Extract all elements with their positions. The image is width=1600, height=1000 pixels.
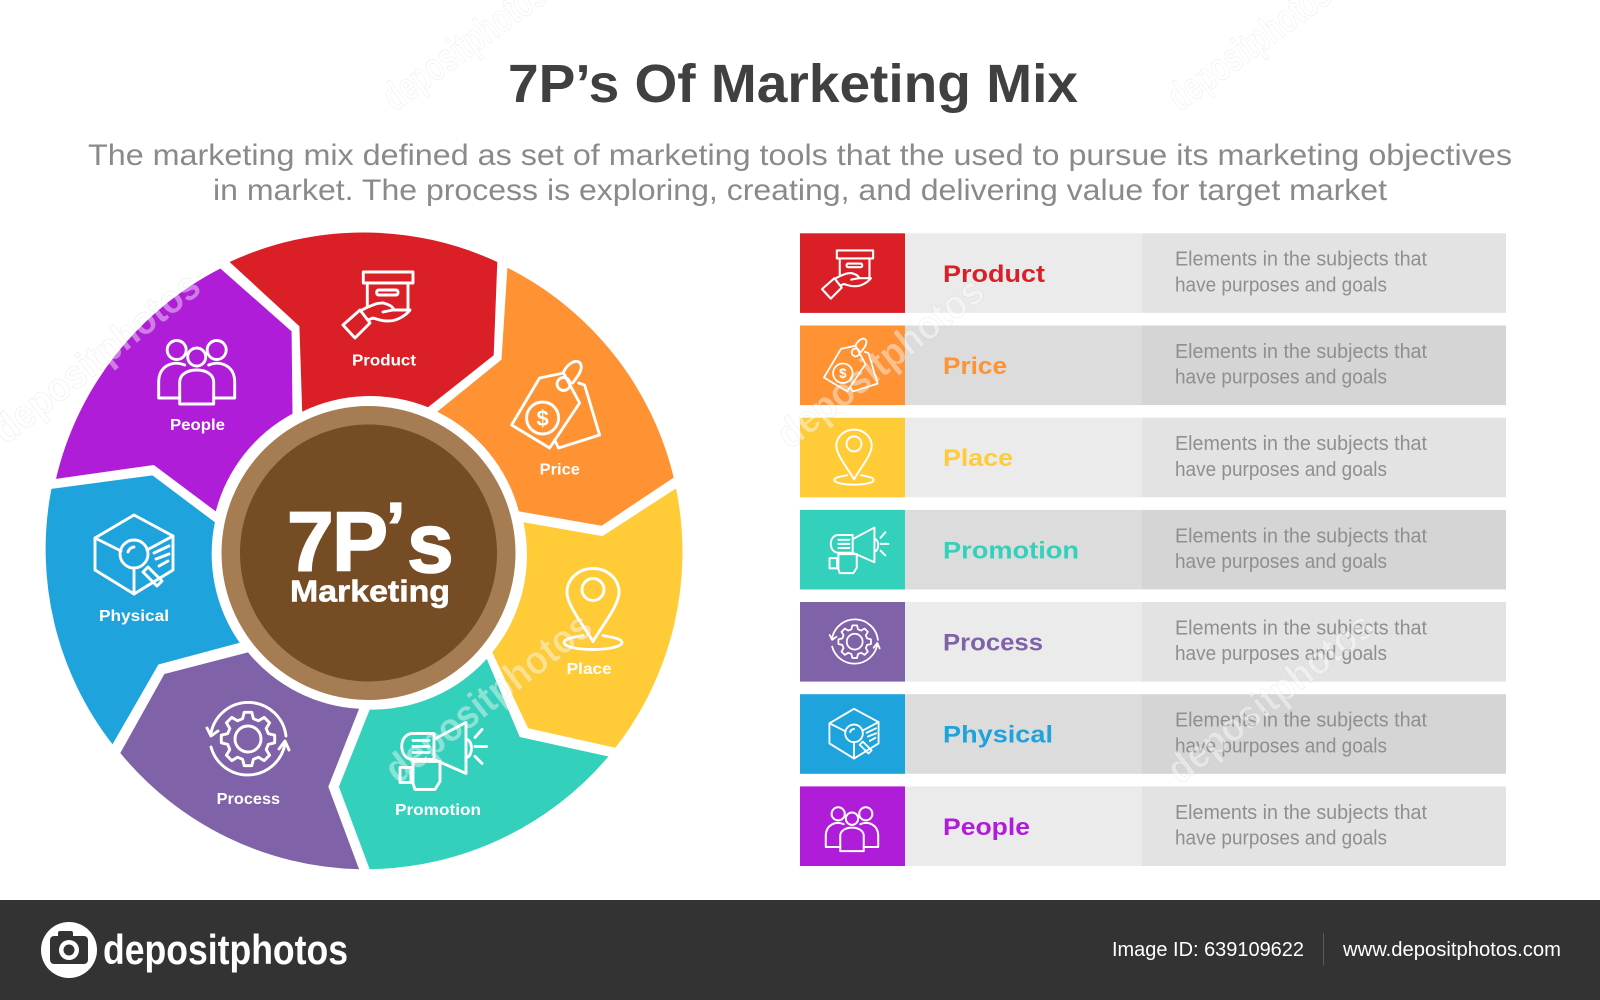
watermarks: depositphotos (768, 269, 993, 457)
row: place (800, 418, 1506, 497)
row: people (800, 786, 1506, 866)
segment: process: Process (217, 791, 280, 808)
row: product: Elements in the subjects that (1175, 249, 1427, 271)
row: people: People (943, 814, 1030, 841)
row: physical (800, 694, 1506, 774)
row: place: Elements in the subjects that (1175, 433, 1427, 455)
watermarks (0, 0, 1383, 792)
wheel diagram (46, 232, 682, 869)
footer logo icon (41, 922, 97, 978)
center hub: s (407, 496, 454, 590)
row: promotion: Elements in the subjects that (1175, 525, 1427, 547)
row: place: Place (943, 445, 1013, 472)
row: price: Price (943, 353, 1007, 380)
center hub: ’ (386, 488, 405, 566)
row: process (800, 602, 1506, 682)
footer bar (0, 900, 1600, 1000)
row: people: Elements in the subjects that (1175, 802, 1427, 824)
segment: physical (46, 475, 240, 744)
center hub: 7 (287, 494, 334, 588)
segment: people (56, 268, 292, 511)
row: price: Elements in the subjects that (1175, 341, 1427, 363)
row: promotion: have purposes and goals (1175, 551, 1387, 573)
row: place: have purposes and goals (1175, 459, 1387, 481)
row: process: have purposes and goals (1175, 643, 1387, 665)
subtitle (88, 139, 1512, 207)
segment: product: Product (352, 352, 416, 370)
row: people: have purposes and goals (1175, 828, 1387, 850)
footer logo wordmark: depositphotos (103, 926, 348, 973)
segment: process (120, 652, 359, 869)
row: product: Product (943, 261, 1045, 288)
center hub (214, 398, 524, 708)
subtitle: in market. The process is exploring, creating, and delivering value for target market (213, 174, 1388, 207)
segment: promotion (339, 659, 608, 869)
segment: physical: Physical (99, 608, 169, 625)
segment: people: People (170, 417, 225, 434)
footer url: www.depositphotos.com (1342, 939, 1561, 961)
row: process: Process (943, 630, 1043, 656)
row: physical: Elements in the subjects that (1175, 710, 1427, 732)
row: promotion (800, 510, 1506, 590)
segment: price: Price (540, 462, 580, 479)
watermarks: depositphotos (376, 604, 601, 792)
row: price: have purposes and goals (1175, 367, 1387, 389)
segment: place: Place (567, 661, 612, 678)
row: product: have purposes and goals (1175, 274, 1387, 296)
footer image id: Image ID: 639109622 (1112, 939, 1304, 961)
subtitle: The marketing mix defined as set of marketing tools that the used to pursue its marketing objectives (88, 139, 1512, 172)
segment: product (230, 232, 497, 412)
row: price (800, 326, 1506, 405)
row: process: Elements in the subjects that (1175, 617, 1427, 639)
segment: place (492, 488, 682, 748)
row: promotion: Promotion (943, 537, 1079, 564)
segment: price (437, 268, 674, 526)
center hub: Marketing (290, 574, 450, 608)
segment: promotion: Promotion (395, 802, 481, 819)
row: product (800, 233, 1506, 313)
title: 7P’s Of Marketing Mix (508, 54, 1078, 114)
row: physical: Physical (943, 722, 1053, 749)
center hub: P (332, 494, 388, 588)
list of seven items (800, 233, 1506, 866)
row: physical: have purposes and goals (1175, 735, 1387, 757)
watermarks: depositphotos (1158, 604, 1383, 792)
